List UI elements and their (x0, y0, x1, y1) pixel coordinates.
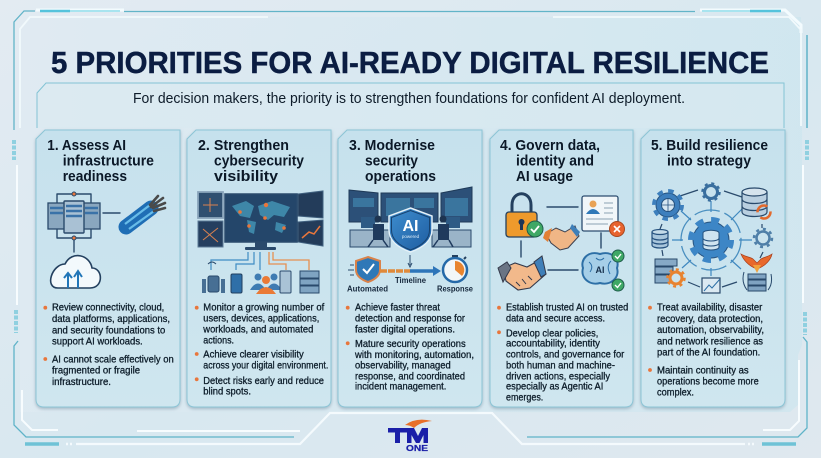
bullets: card 5: complex. (657, 386, 694, 398)
bullets: card 1: support AI workloads. (52, 335, 143, 347)
heading: card 5 (651, 137, 768, 170)
icon: resilience gear network (652, 184, 772, 293)
icon: security monitors and connected devices (198, 191, 323, 294)
bullets: card 3: Achieve faster threat (355, 302, 440, 314)
heading: card 1: 1. Assess AI (47, 137, 126, 154)
bullets: card 4: Develop clear policies, (506, 327, 598, 339)
heading: card 4: identity and (516, 152, 594, 170)
bullets: card 2: Achieve clearer visibility (203, 349, 304, 361)
shield sub-label: powered (402, 234, 420, 239)
bullets: card 5: Treat availability, disaster (657, 302, 763, 314)
heading: card 4: 4. Govern data, (500, 137, 600, 154)
icon: padlock, ID card, handshakes and AI brain (498, 194, 624, 291)
bullets: card 3: with monitoring, automation, (354, 349, 474, 361)
small handshake (543, 224, 580, 250)
bullets: card 5: operations become more (657, 375, 759, 387)
bullets: card 5 (648, 302, 764, 398)
heading: card 3: 3. Modernise (349, 137, 435, 154)
heading: card 1 (47, 137, 154, 185)
bullets: card 2: blind spots. (203, 386, 251, 398)
bullets: card 5: part of the AI foundation. (657, 346, 760, 358)
timeline label: Timeline (395, 275, 426, 285)
bullets: card 3: Mature security operations (355, 338, 466, 350)
bullets: card 1 (43, 302, 174, 388)
title: 5 PRIORITIES FOR AI-READY DIGITAL RESILIENCE (51, 46, 769, 80)
automated label: Automated (347, 284, 388, 294)
heading: card 4: AI usage (516, 168, 573, 185)
bullets: card 4: controls, and governance for (506, 349, 625, 361)
heading: card 3: security (365, 152, 419, 170)
bullets: card 5: Maintain continuity as (657, 364, 749, 376)
heading: card 2 (198, 137, 305, 185)
bullets: card 4: driven actions, especially (506, 370, 611, 382)
logo: TM ONE (388, 420, 432, 453)
bullets: card 1: data platforms, applications, (52, 313, 170, 325)
bullets: card 3 (346, 302, 474, 392)
panel: 4 govern data, identity and AI usage (490, 130, 633, 407)
subtitle text: For decision makers, the priority is to strengthen foundations for confident AI deployment. (133, 90, 685, 107)
bullets: card 4 (497, 302, 628, 404)
panel: 3 modernise security operations (338, 130, 482, 407)
icon: security operations centre with AI shield and timeline (347, 187, 473, 294)
bullets: card 4: accountability, identity (506, 338, 601, 350)
heading: card 1: infrastructure (63, 152, 154, 170)
panel: 5 build resilience into strategy (641, 130, 785, 407)
bullets: card 1: and security foundations to (52, 324, 165, 336)
bullets: card 1: Review connectivity, cloud, (52, 302, 164, 314)
bullets: card 3: observability, managed (355, 360, 451, 372)
bullets: card 3: faster digital operations. (355, 323, 455, 335)
panel: 2 strengthen cybersecurity visibility (187, 130, 331, 407)
bullets: card 4: both human and machine- (506, 360, 615, 372)
bullets: card 4: emerges. (506, 392, 543, 404)
heading: card 3: operations (365, 168, 436, 185)
heading: card 4 (500, 137, 600, 185)
bullets: card 3: response, and coordinated (355, 370, 465, 382)
bullets: card 2: across your digital environment. (203, 360, 328, 372)
large handshake (498, 256, 546, 290)
bullets: card 2: Monitor a growing number of (203, 302, 324, 314)
bullets: card 2: workloads, and automated (202, 323, 313, 335)
bullets: card 5: recovery, data protection, (657, 313, 763, 325)
bullets: card 4: Establish trusted AI on trusted (506, 302, 628, 314)
heading: card 1: readiness (63, 168, 127, 185)
bullets: card 1: AI cannot scale effectively on (52, 354, 174, 366)
bullets: card 3: detection and response for (355, 313, 465, 325)
icon: servers, fibre cable and cloud (48, 192, 165, 288)
heading: card 3 (349, 137, 436, 185)
bullets: card 1: fragmented or fragile (52, 365, 140, 377)
subtitle panel (37, 83, 784, 128)
bullets: card 5: and network resilience as (657, 335, 763, 347)
heading: card 2: 2. Strengthen (198, 137, 289, 154)
heading: card 5: into strategy (667, 152, 752, 170)
shield label: AI (402, 218, 418, 235)
heading: card 5: 5. Build resilience (651, 137, 768, 154)
response label: Response (437, 284, 473, 294)
bullets: card 2 (195, 302, 328, 398)
logo: TM ONE: ONE (406, 443, 428, 453)
bullets: card 2: actions. (203, 334, 234, 346)
bullets: card 1: infrastructure. (52, 376, 111, 388)
heading: card 2: cybersecurity (214, 152, 305, 170)
bullets: card 3: incident management. (355, 380, 446, 392)
bullets: card 4: especially as Agentic AI (506, 380, 603, 392)
bullets: card 2: users, devices, applications, (203, 313, 319, 325)
bullets: card 5: automation, observability, (657, 324, 764, 336)
panel: 1 assess AI infrastructure readiness (36, 130, 180, 407)
bullets: card 4: data and secure access. (506, 313, 605, 325)
brain label: AI (596, 265, 604, 275)
bullets: card 2: Detect risks early and reduce (203, 375, 324, 387)
heading: card 2: visibility (214, 168, 279, 185)
